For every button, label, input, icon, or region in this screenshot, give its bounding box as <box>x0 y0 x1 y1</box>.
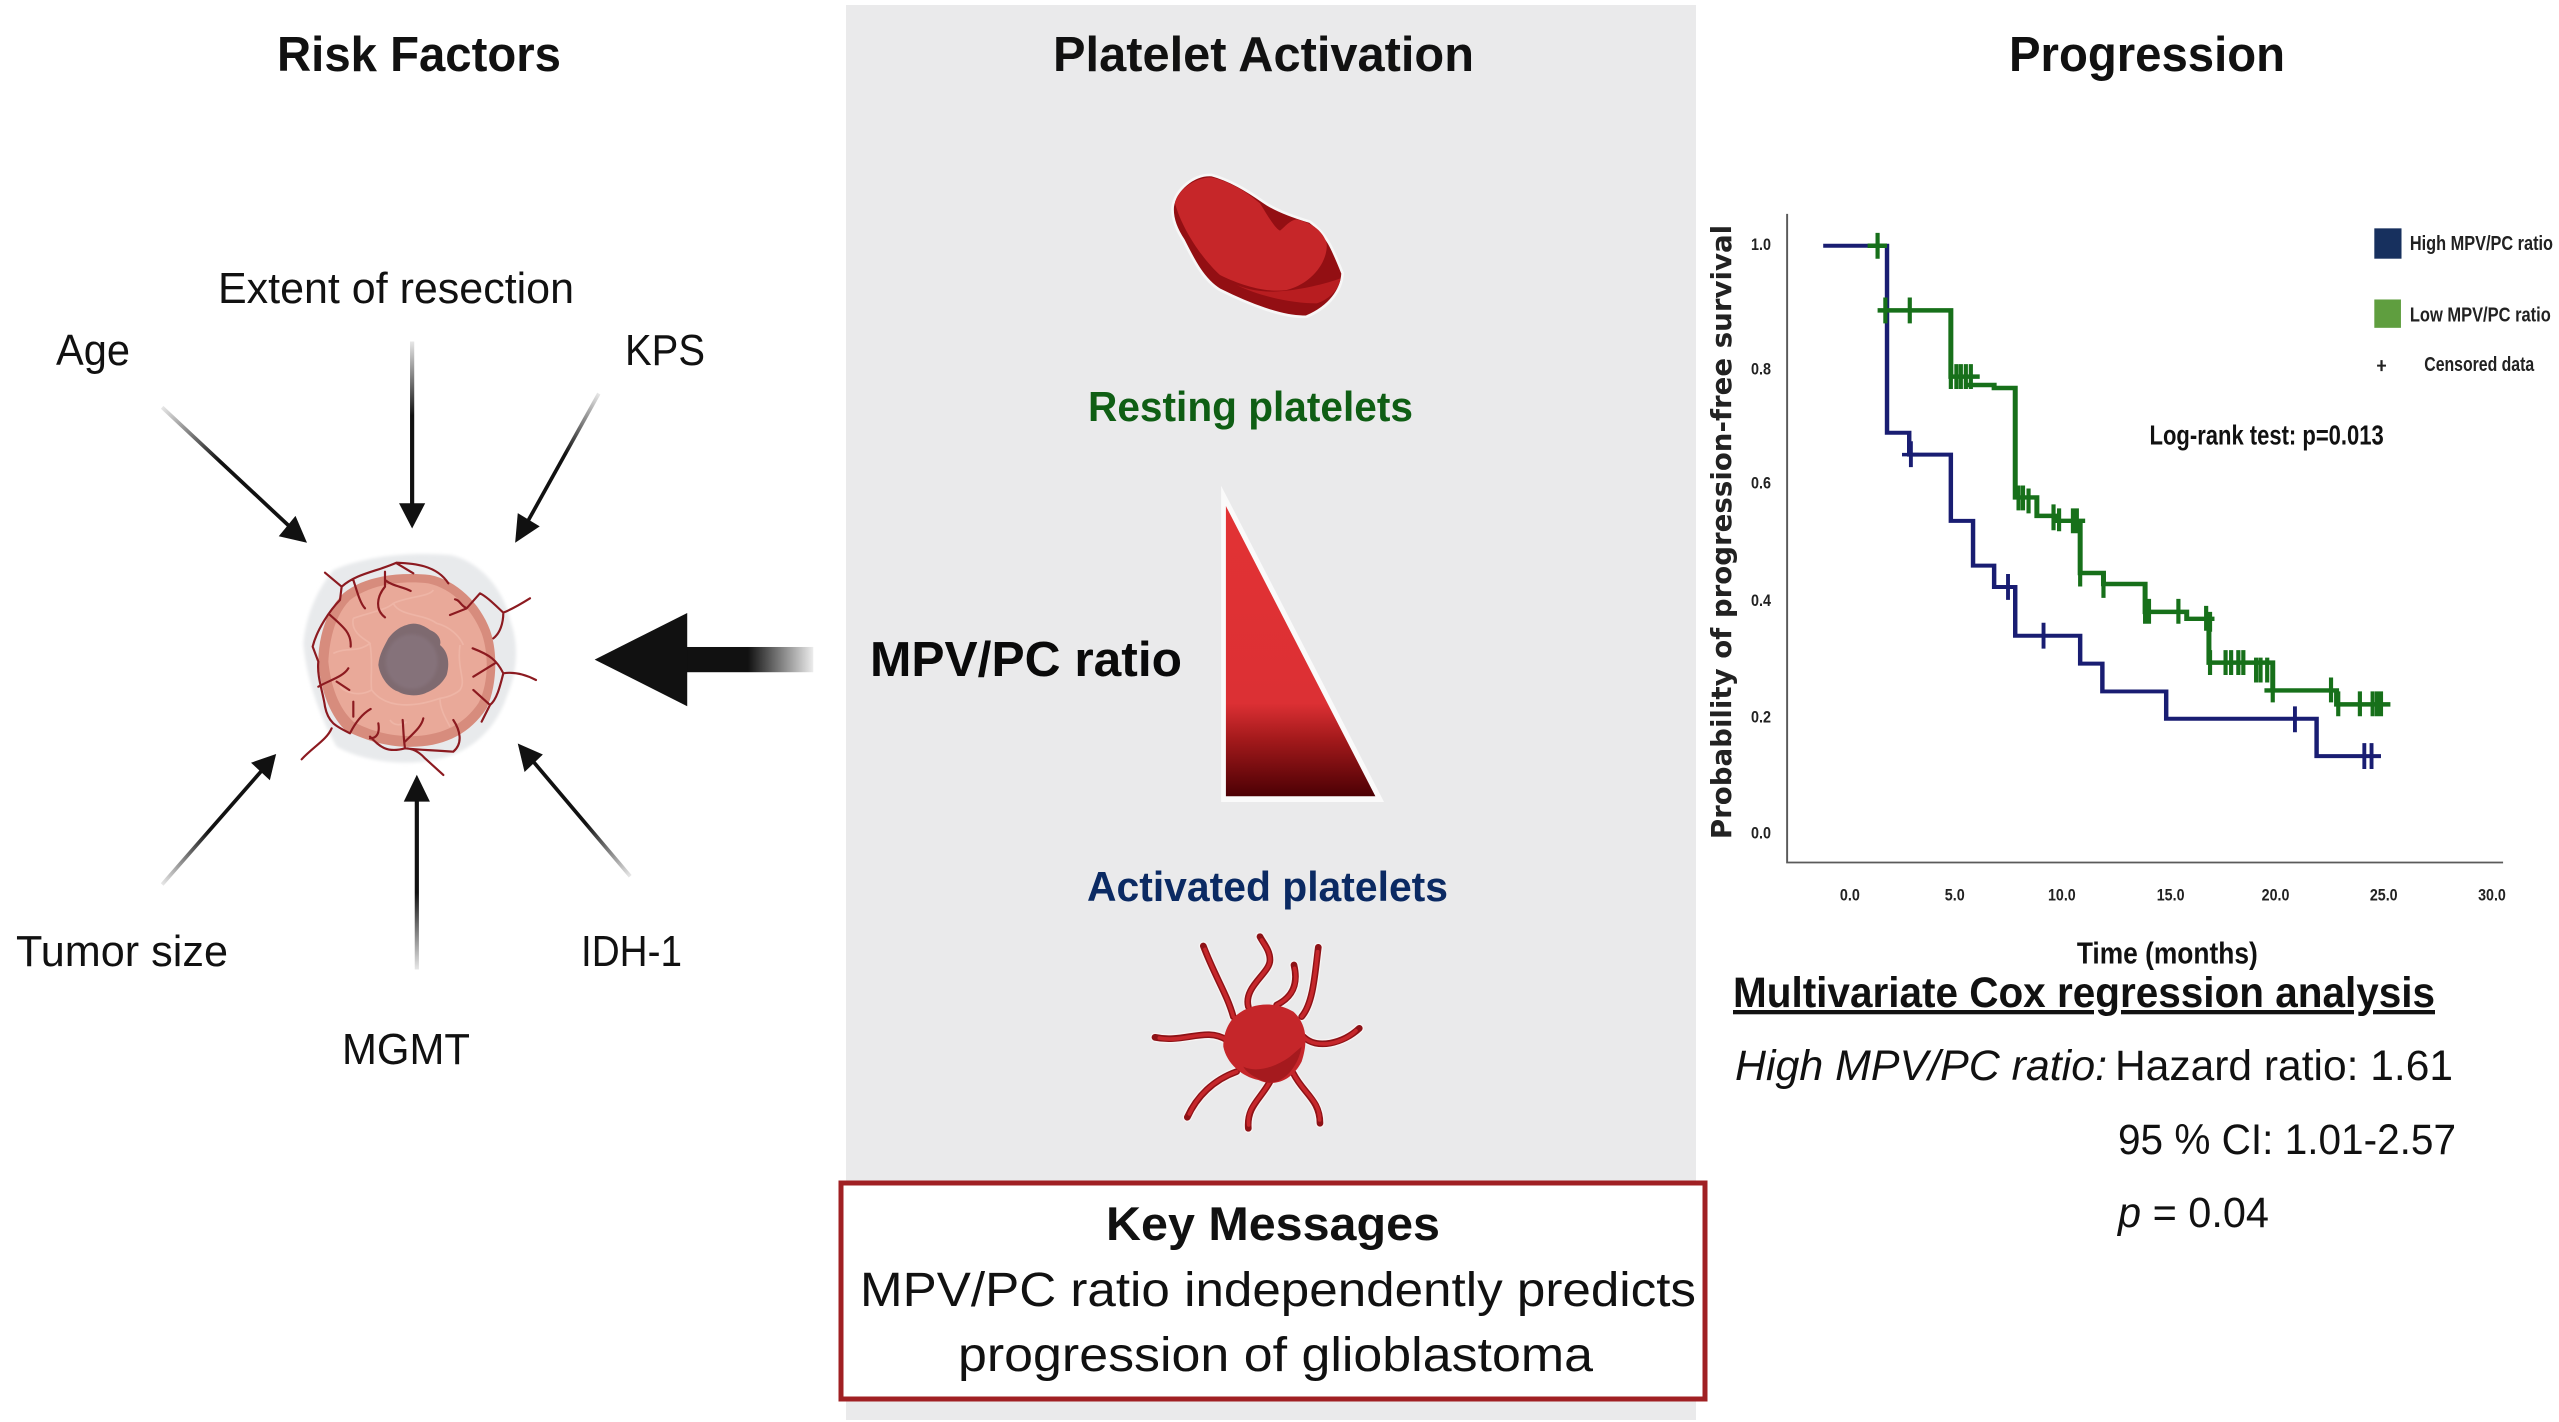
y axis tick labels: 0.6 <box>1751 473 1771 492</box>
x axis tick labels: 10.0 <box>2048 885 2076 904</box>
icon: glioblastoma tumor <box>302 554 536 775</box>
y axis tick labels: 0.2 <box>1751 707 1771 726</box>
panel: platelet activation background <box>846 5 1696 1420</box>
legend: high MPV/PC ratio <box>2374 228 2553 259</box>
curve: low MPV/PC ratio <box>1868 233 2390 716</box>
heading: Progression: Progression <box>2009 28 2285 82</box>
label: IDH-1: IDH-1 <box>581 927 682 976</box>
x axis tick labels <box>1840 885 2506 904</box>
key messages line 1: MPV/PC ratio independently predicts <box>860 1264 1696 1317</box>
label: Tumor size: Tumor size <box>16 927 228 976</box>
y axis tick labels: 1.0 <box>1751 235 1771 254</box>
blood vessels <box>302 563 536 775</box>
arrow: MGMT to tumor <box>404 775 430 970</box>
key messages line 2: progression of glioblastoma <box>958 1329 1593 1382</box>
arrow: Age to tumor <box>162 407 307 543</box>
heading: Risk Factors: Risk Factors <box>277 28 561 82</box>
heading: Multivariate Cox regression analysis: Multivariate Cox regression analysis <box>1733 969 2435 1017</box>
platelet arms <box>1155 937 1359 1128</box>
tumor core highlight <box>386 634 438 689</box>
text: confidence interval: 95 % CI: 1.01-2.57 <box>2118 1116 2456 1164</box>
label: MPV/PC ratio: MPV/PC ratio <box>870 633 1182 687</box>
icon: resting platelet <box>1173 175 1343 317</box>
platelet arm highlights <box>1159 940 1356 1125</box>
panel: key messages <box>841 1183 1705 1399</box>
icon: activated platelet <box>1155 937 1359 1128</box>
tumor halo <box>303 554 516 763</box>
y axis title: Probability of progression-free survival <box>1707 225 1738 839</box>
text: High MPV/PC ratio label: High MPV/PC ratio: <box>1735 1042 2107 1090</box>
arrow: Tumor size to tumor <box>162 754 276 884</box>
tumor cell lobes <box>333 590 463 727</box>
curve: high MPV/PC ratio <box>1823 246 2381 769</box>
legend: low MPV/PC ratio <box>2374 299 2551 328</box>
tumor body <box>318 574 495 747</box>
y axis tick labels: 0.4 <box>1751 591 1771 610</box>
tumor core <box>378 624 448 695</box>
text: hazard ratio: Hazard ratio: 1.61 <box>2115 1042 2453 1090</box>
x axis tick labels: 20.0 <box>2262 885 2289 904</box>
platelet lower band <box>1237 278 1341 303</box>
y axis tick labels: 0.0 <box>1751 824 1771 842</box>
arrow: IDH-1 to tumor <box>518 744 630 876</box>
key messages box <box>841 1183 1705 1399</box>
x axis tick labels: 30.0 <box>2478 885 2506 904</box>
label: MGMT: MGMT <box>342 1025 470 1074</box>
platelet halo <box>1155 937 1359 1128</box>
platelet body <box>1223 1005 1305 1083</box>
x axis tick labels: 5.0 <box>1945 885 1965 904</box>
arrow: large arrow from MPV/PC ratio to tumor <box>595 613 813 706</box>
label: Resting platelets: Resting platelets <box>1088 383 1413 430</box>
log-rank annotation: Log-rank test: p=0.013 <box>2150 420 2384 451</box>
label: Age: Age <box>56 326 130 375</box>
x axis tick labels: 15.0 <box>2157 885 2185 904</box>
x axis title: Time (months) <box>2077 935 2258 970</box>
arrow: Extent of resection to tumor <box>399 341 425 529</box>
text: p value: p = 0.04 <box>2116 1189 2269 1237</box>
chart: Kaplan-Meier progression-free survival <box>1707 214 2553 970</box>
platelet base <box>1173 175 1343 317</box>
label: KPS: KPS <box>625 326 705 375</box>
label: Extent of resection: Extent of resection <box>218 264 574 313</box>
heading: Platelet Activation: Platelet Activation <box>1053 28 1474 82</box>
label: Activated platelets: Activated platelets <box>1087 863 1448 910</box>
y axis tick labels <box>1751 235 1771 842</box>
gradient triangle <box>1226 506 1375 796</box>
key messages title: Key Messages <box>1106 1197 1440 1250</box>
arrow: KPS to tumor <box>515 394 599 543</box>
x axis tick labels: 25.0 <box>2370 885 2398 904</box>
x axis tick labels: 0.0 <box>1840 885 1860 904</box>
y axis tick labels: 0.8 <box>1751 359 1771 378</box>
platelet top face <box>1175 177 1327 291</box>
chart axes <box>1787 214 2503 863</box>
tumor inner tissue <box>328 582 487 736</box>
legend: censored data <box>2377 354 2534 376</box>
